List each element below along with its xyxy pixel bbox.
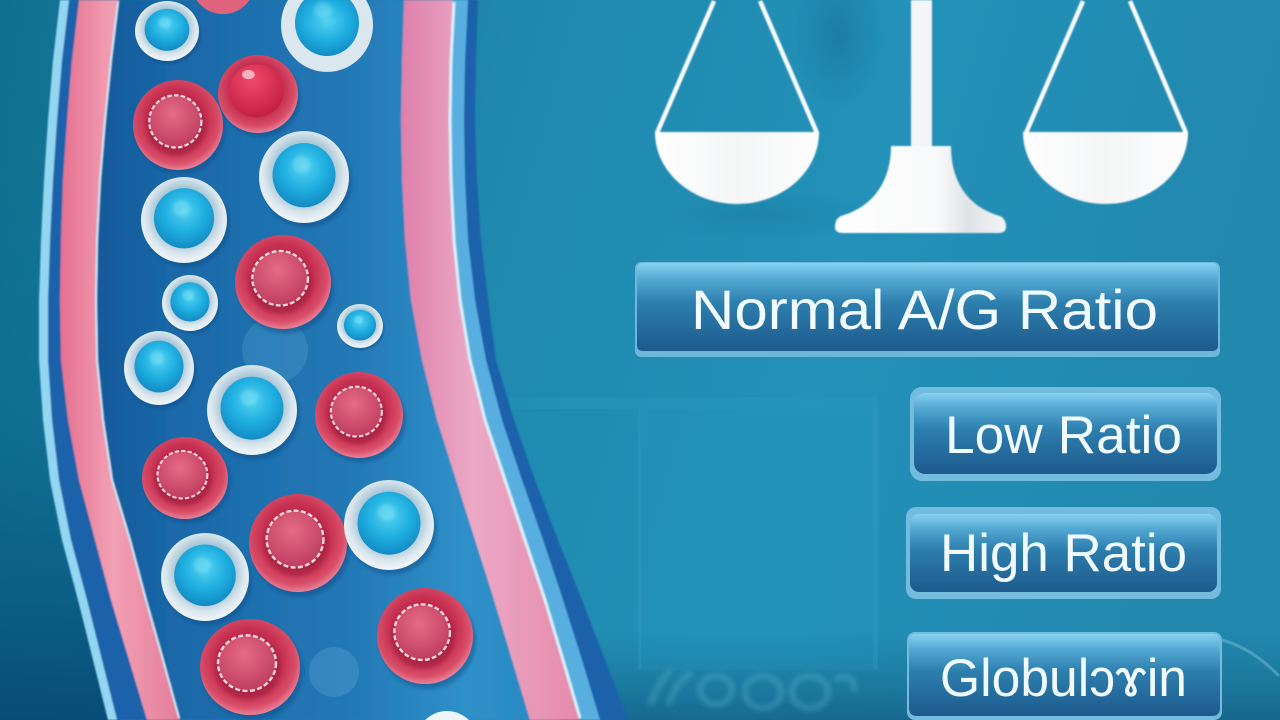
white cell [161,533,252,625]
white cell [337,304,384,350]
red blood cell, cropped at top [196,0,250,14]
faint background panel and wave motif [510,397,1279,708]
right outer wall highlight [449,0,600,720]
icon: balance scale [655,0,1188,233]
left inner lining [96,2,179,718]
base [835,146,1006,233]
button: Globulin label, cropped at bottom: Globulɔɤin [940,649,1187,708]
white cell [207,365,300,460]
red blood cell [133,80,226,174]
white cell [259,131,352,228]
faint bubbles in vessel [242,317,359,697]
left pink wall [60,0,180,720]
red blood cell [200,619,303,720]
white cell, cropped at bottom [425,711,469,720]
button: Normal A/G Ratio [635,262,1220,357]
white cell [141,177,230,267]
white cell, cropped at top [281,0,373,72]
white cell [344,480,437,574]
left wall highlight [39,0,117,720]
red blood cell [249,494,350,597]
right pan [1023,1,1188,204]
vessel lumen [96,0,530,720]
right pink wall [401,0,580,720]
red blood cell: solid centre [218,55,300,137]
button: High Ratio [906,507,1221,599]
button: Globulin label, cropped at bottom [907,632,1222,720]
right wall lining [450,2,580,718]
red blood cell [377,588,476,689]
red blood cell [142,437,231,523]
white cell [135,1,201,64]
vessel outer wall [39,0,628,720]
button: High Ratio: High Ratio [940,524,1187,583]
button: Low Ratio [910,387,1221,481]
left pan [655,1,819,204]
white cell [162,275,220,334]
pole [911,0,932,150]
blood vessel [39,0,628,720]
red blood cell [315,372,406,462]
button: Normal A/G Ratio: Normal A/G Ratio [691,278,1158,341]
button: Low Ratio: Low Ratio [945,406,1182,465]
red blood cell [235,235,334,334]
white cell [124,331,196,409]
